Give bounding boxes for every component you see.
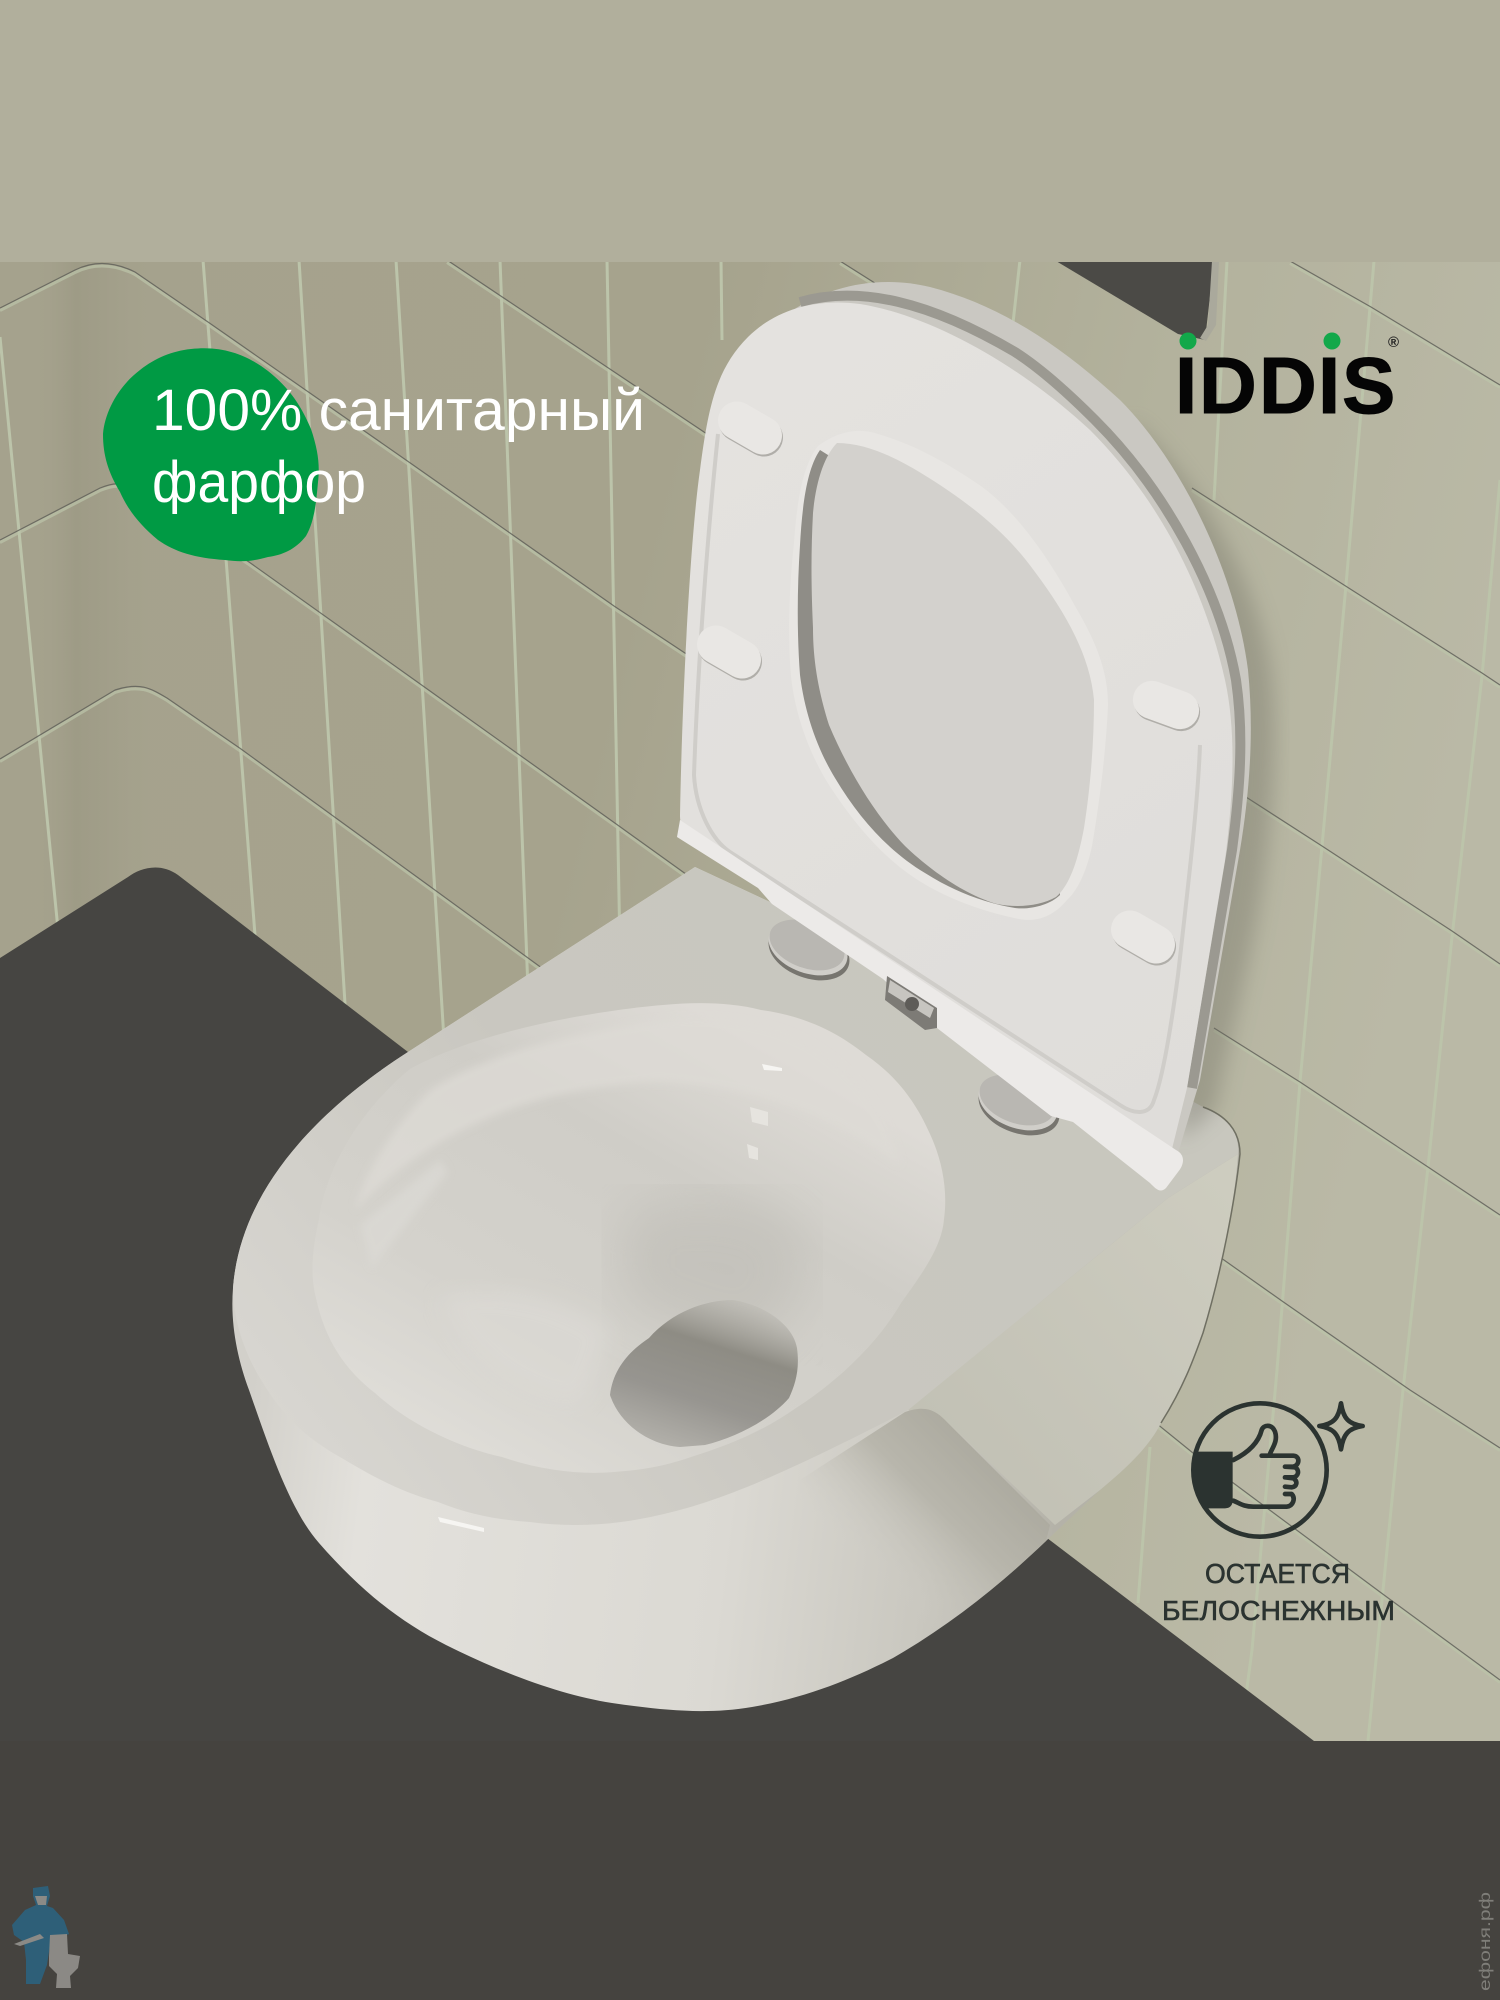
inner pale swirl [440, 1290, 610, 1405]
right edge shadow line [1161, 1107, 1240, 1423]
dark counter [0, 867, 1314, 1741]
lid grey band [800, 296, 1240, 1088]
toilet bowl [232, 867, 1240, 1711]
shaded side panel [800, 1409, 1050, 1690]
lid wall shadow [1130, 420, 1275, 1140]
toilet seat lid [677, 282, 1275, 1191]
logo wordmark: IDDIS [1175, 341, 1395, 430]
lid opening ring [789, 431, 1108, 920]
lid opening interior [812, 443, 1094, 906]
headline: фарфор [152, 450, 366, 515]
headline: 100% санитарный [152, 378, 645, 443]
green blob [103, 348, 319, 561]
plumber toilet [49, 1934, 80, 1988]
seat bumper 4 [1104, 904, 1183, 972]
upper inner light [355, 1018, 900, 1210]
lid face [680, 302, 1233, 1152]
glaze highlights [438, 1064, 782, 1532]
lid recess outline [694, 434, 1200, 1112]
flush panel on wall [1056, 261, 1219, 341]
bowl body [232, 867, 1240, 1711]
hinges [761, 910, 1067, 1146]
top band [0, 0, 1500, 262]
watermark: site name: ефоня.рф [1477, 1892, 1494, 1991]
lid back rim [790, 282, 1251, 1160]
watermark: plumber icon [12, 1886, 80, 1988]
wall with tiles [0, 260, 1500, 1741]
lid opening shadow [798, 450, 1060, 908]
hinge bar [677, 820, 1183, 1191]
drain trap [610, 1300, 798, 1447]
right side face [908, 1154, 1238, 1525]
rim-wash ledge [360, 1160, 448, 1268]
seat bumper 1 [711, 395, 790, 463]
rim and deck [233, 867, 1238, 1525]
icon: thumbs up [1193, 1403, 1363, 1537]
inner soft shadow [620, 1199, 804, 1350]
seat bumper 3 [1128, 676, 1205, 736]
icon caption: БЕЛОСНЕЖНЫМ [1162, 1595, 1395, 1626]
IDDIS logo [1175, 332, 1399, 430]
icon caption: ОСТАЕТСЯ [1205, 1558, 1350, 1589]
plumber figure [12, 1886, 69, 1984]
plumber face and wrench [14, 1896, 47, 1946]
hinge pad right [971, 1065, 1067, 1146]
logo dots [1180, 332, 1340, 350]
bottom band [0, 1741, 1500, 2000]
bowl opening [312, 1003, 945, 1473]
registered mark: ® [1388, 334, 1399, 351]
seat bumper 2 [690, 619, 769, 687]
hinge pad left [761, 910, 857, 991]
chrome clip [885, 976, 937, 1030]
